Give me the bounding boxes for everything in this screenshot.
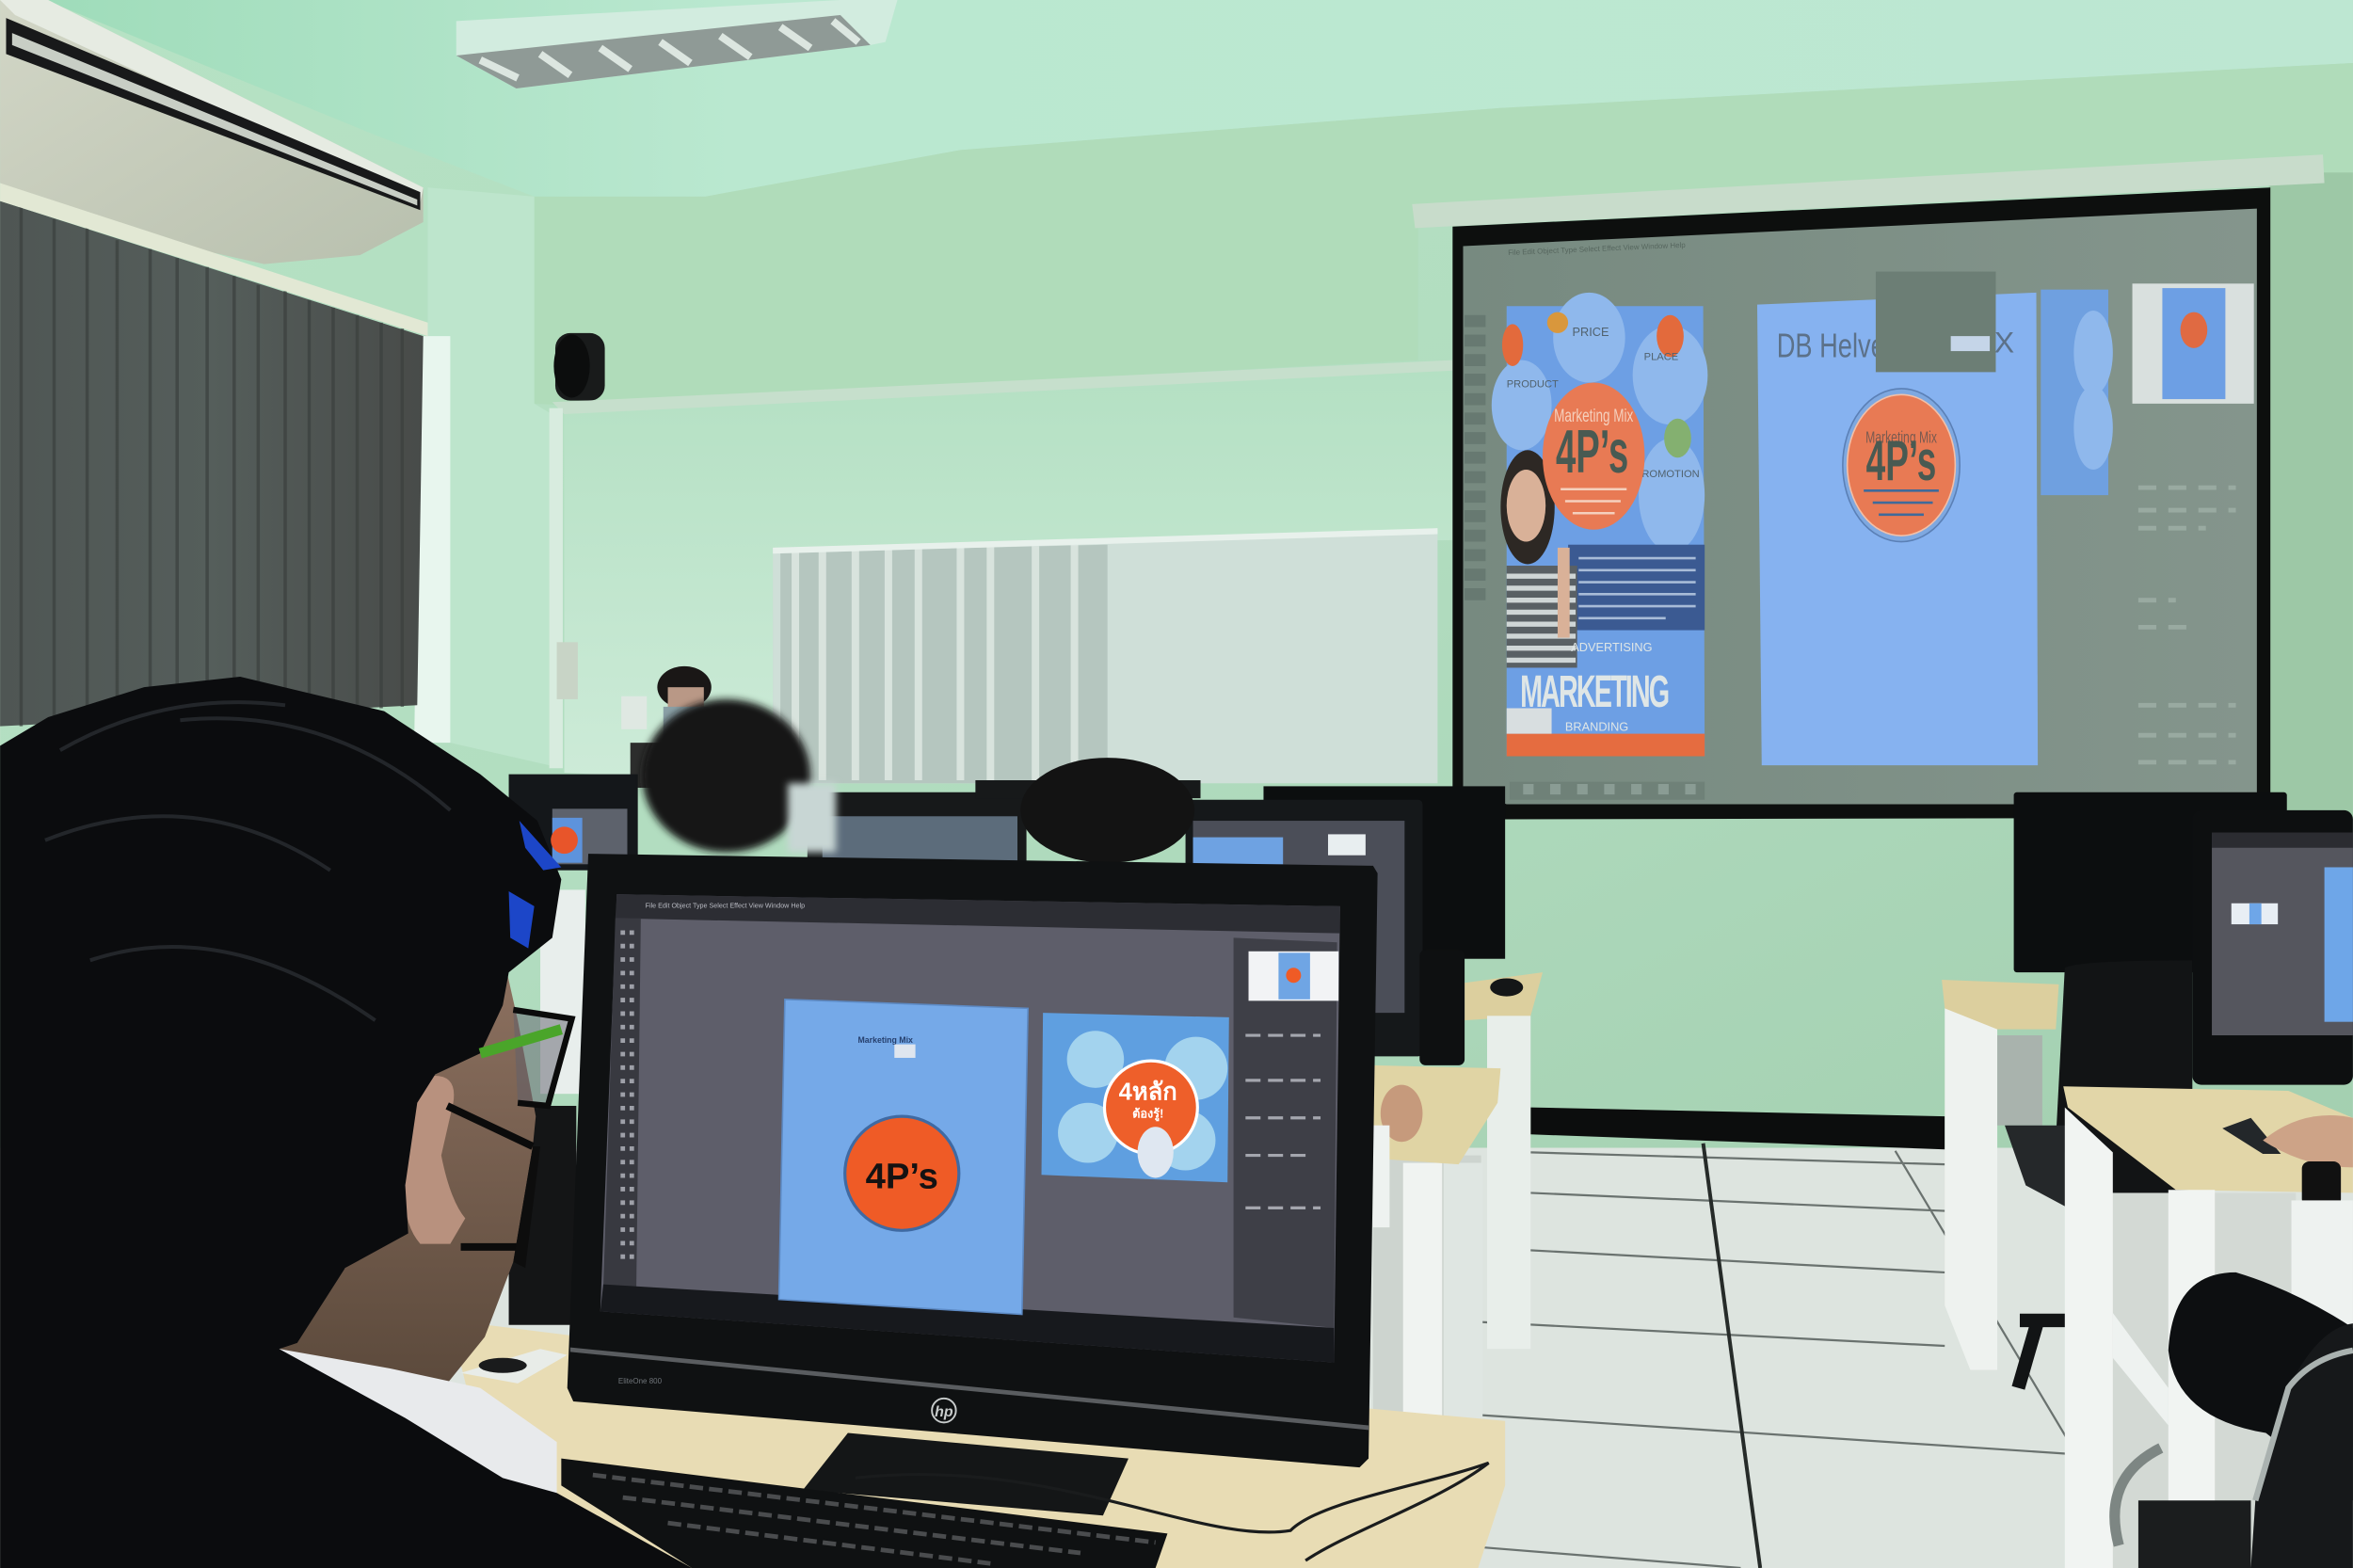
poster on projector: ADVERTISING (1571, 640, 1652, 654)
hp logo (932, 1399, 956, 1422)
corner column wall (417, 187, 550, 765)
second artboard: X (1994, 326, 2014, 360)
navigator thumbnail (1249, 952, 1338, 1000)
whiteboard (773, 528, 1437, 783)
right front monitor (2192, 810, 2353, 1085)
mask straps (447, 1106, 533, 1247)
main monitor: File Edit Object Type Select Effect View Window Help (646, 903, 805, 910)
poster on projector (1492, 293, 1707, 757)
wall speaker (553, 333, 605, 401)
air conditioner (0, 0, 424, 264)
third artboard and navigator (1475, 283, 2254, 790)
projector screen: File Edit Object Type Select Effect View Window Help (1508, 241, 1686, 257)
teacher at front (631, 666, 735, 788)
main monitor (568, 854, 1378, 1467)
cable (856, 1463, 1489, 1560)
glasses (513, 1010, 572, 1106)
window blinds (0, 183, 427, 727)
back students (642, 699, 1194, 863)
model label: EliteOne 800 (618, 1377, 663, 1385)
poster on projector: PRODUCT (1507, 378, 1559, 390)
right front desk and seated student (2063, 1086, 2353, 1568)
mask edge (513, 1146, 540, 1268)
shirt collar (280, 1349, 557, 1493)
second artboard (1757, 272, 2038, 765)
poster on projector: BRANDING (1565, 719, 1628, 733)
poster on second artboard: 4หลัก (1119, 1080, 1177, 1106)
second artboard: 4P’s (1866, 429, 1936, 492)
poster on projector: MARKETING (1520, 666, 1670, 717)
right back monitor, desk and chair (1942, 792, 2287, 1388)
glasses temple (480, 1030, 561, 1053)
ceiling light fixture (456, 0, 897, 88)
hp logo: hp (935, 1404, 953, 1420)
window light strip (414, 336, 450, 743)
foreground student (0, 677, 692, 1568)
poster on projector: PROMOTION (1635, 469, 1700, 480)
poster circle heading: Marketing Mix (1554, 406, 1634, 426)
dark area behind main monitor, left (509, 1106, 576, 1325)
upper wall band (535, 63, 2353, 405)
poster person (1500, 450, 1577, 734)
skin of face and neck (280, 960, 536, 1384)
poster circle heading: 4P’s (1556, 419, 1628, 487)
back wall (0, 0, 2353, 1148)
back student's white shirt (540, 889, 585, 1094)
hair and head (0, 677, 692, 1568)
wall right of screen (2269, 172, 2353, 818)
lower wall left of whiteboard (565, 369, 1452, 783)
second artboard: Marketing Mix (1865, 429, 1937, 447)
keyboard (561, 1459, 1167, 1568)
artboard with 4P's circle: 4P’s (866, 1157, 938, 1197)
floor (1373, 1108, 2184, 1568)
second artboard: DB Helve (1777, 327, 1885, 364)
poster on second artboard: ต้องรู้! (1132, 1107, 1163, 1122)
ear (405, 1076, 465, 1244)
poster on projector: PRICE (1573, 325, 1609, 339)
ceiling (45, 0, 2353, 197)
projector screen (1412, 154, 2325, 819)
artboard with 4P's circle: Marketing Mix (858, 1035, 913, 1045)
middle desks (1373, 950, 1543, 1426)
foreground desk (450, 1320, 1505, 1568)
wall conduit (550, 360, 1452, 768)
poster circle heading (1543, 383, 1644, 530)
blue hair highlight (509, 821, 561, 949)
artboard with 4P's circle (779, 1000, 1028, 1315)
poster on second artboard (1042, 1013, 1229, 1182)
poster on projector: PLACE (1644, 352, 1678, 363)
monitor stand (803, 1433, 1128, 1515)
back row monitors (509, 775, 1505, 1056)
